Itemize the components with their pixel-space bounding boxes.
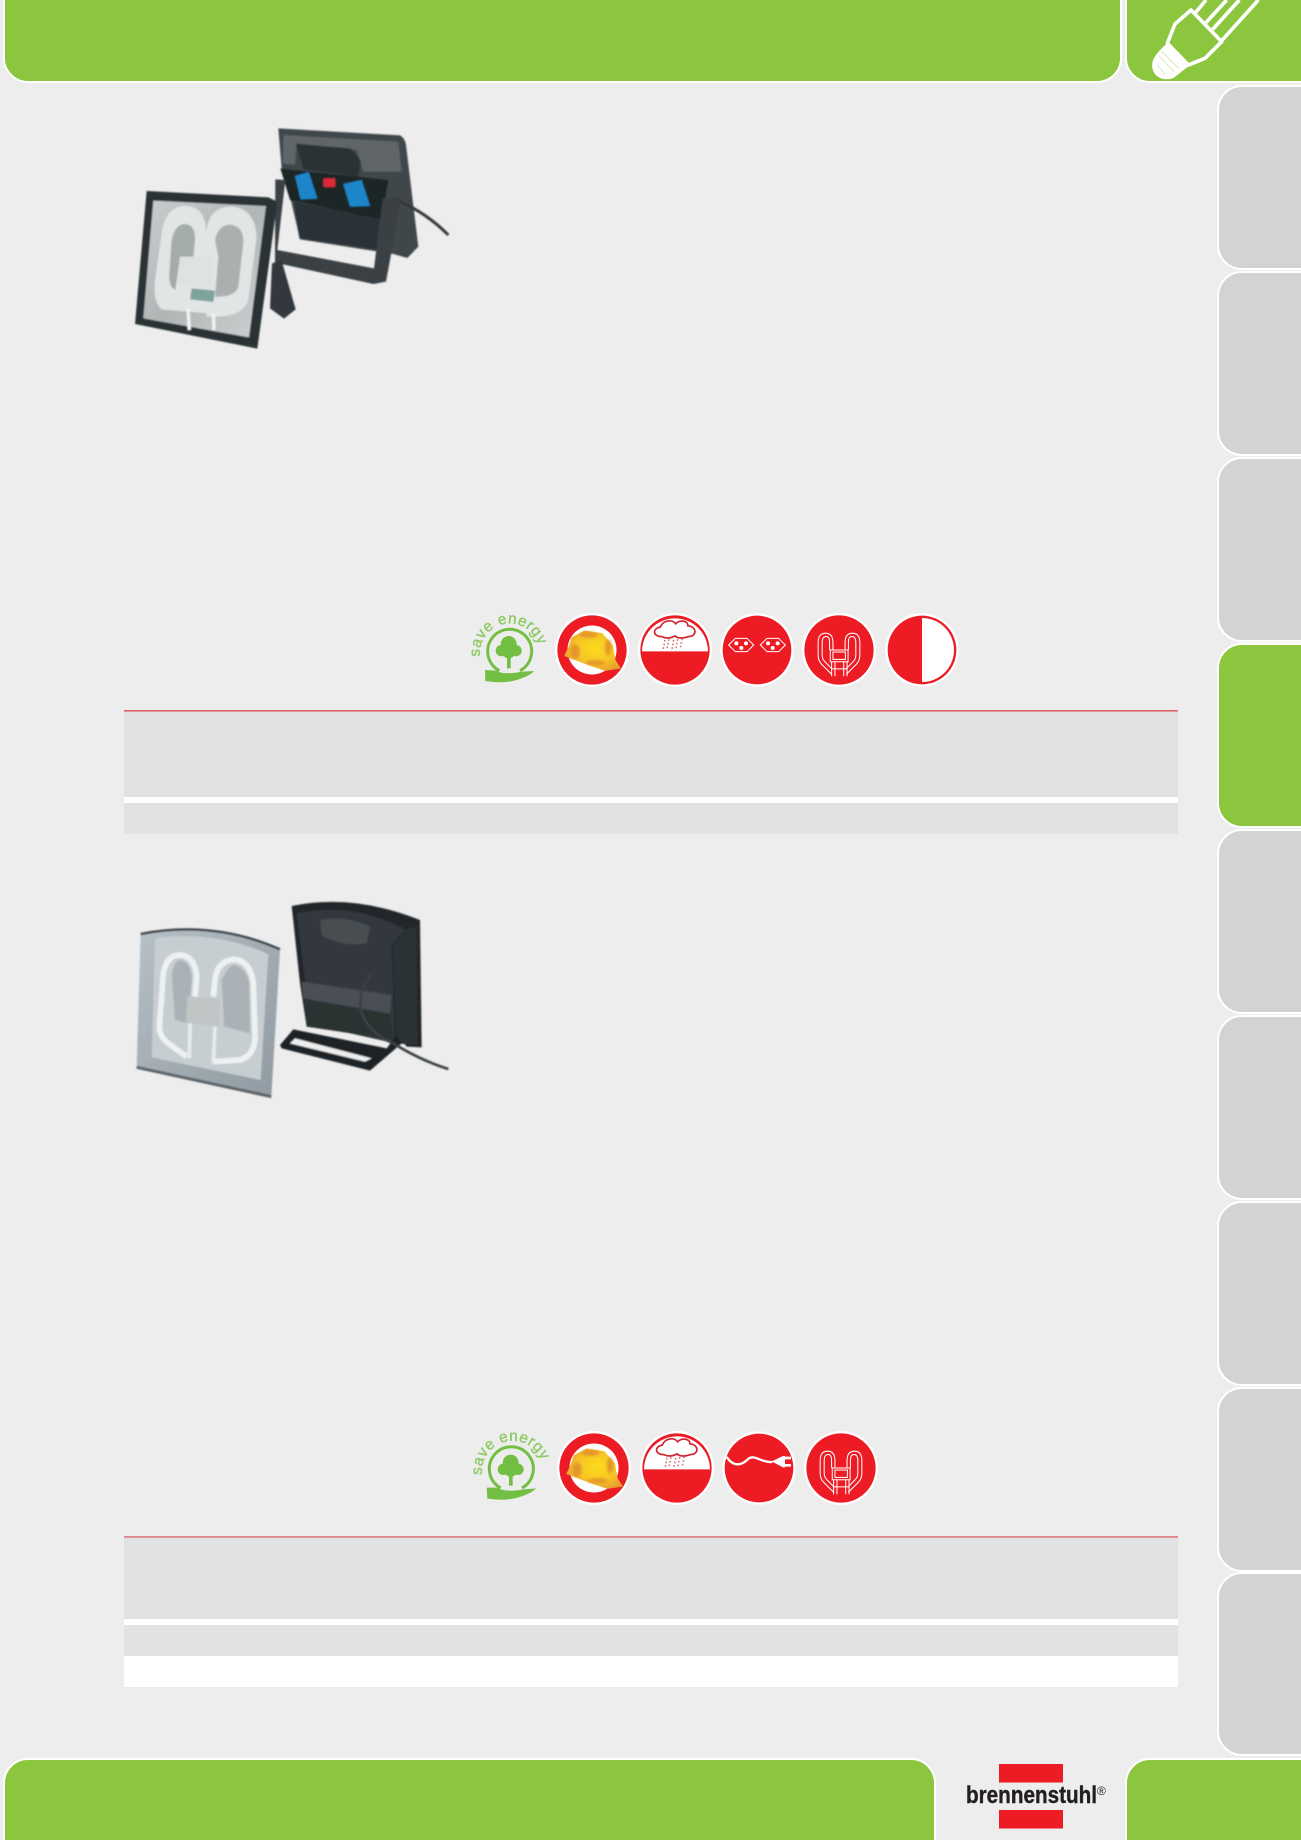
stand frame: [280, 1029, 402, 1071]
icon row: product 2: [473, 1431, 878, 1505]
icon: splash-proof: [638, 613, 712, 687]
rear housing: [292, 902, 422, 1047]
icon: energy saving bulb: [1153, 0, 1258, 79]
power cable: [360, 973, 448, 1069]
product photo: slim floodlight: [137, 902, 448, 1097]
registered mark: ®: [1097, 1784, 1106, 1798]
footer bar: [4, 1759, 935, 1840]
twin tube: [159, 955, 255, 1063]
icon: save energy: [471, 615, 546, 682]
icon: twin tube lamp: [802, 613, 876, 687]
icon: half power switch: [885, 613, 959, 687]
front housing: [137, 929, 280, 1097]
logo wordmark: brennenstuhl: [966, 1782, 1097, 1809]
twin tube: [155, 206, 257, 330]
header tab with bulb icon: [1126, 0, 1301, 82]
footer page tab: [1126, 1759, 1301, 1840]
spec table: product 1: [124, 710, 1178, 834]
icon: cable and plug: [722, 1431, 796, 1505]
power cable: [400, 202, 448, 235]
icon: save energy: [473, 1432, 549, 1500]
icon: splash-proof: [640, 1431, 714, 1505]
icon: impact protection: [555, 613, 629, 687]
icon: twin tube lamp: [804, 1431, 878, 1505]
icon: save energy: save energy: [471, 615, 546, 656]
lamp glass: [143, 201, 266, 337]
brand logo: [966, 1764, 1106, 1828]
front housing: [135, 191, 277, 349]
icon: save energy: save energy: [473, 1432, 549, 1475]
icon: impact protection: [557, 1431, 631, 1505]
icon: two sockets: [720, 613, 794, 687]
rear housing: [278, 128, 418, 258]
side navigation tabs: [1218, 86, 1301, 1755]
header bar: [4, 0, 1121, 82]
stand frame: [275, 179, 402, 284]
front stand foot: [270, 261, 296, 319]
product photo: floodlight with sockets: [135, 128, 448, 349]
spec table: product 2: [124, 1536, 1178, 1687]
icon row: product 1: [471, 613, 958, 687]
